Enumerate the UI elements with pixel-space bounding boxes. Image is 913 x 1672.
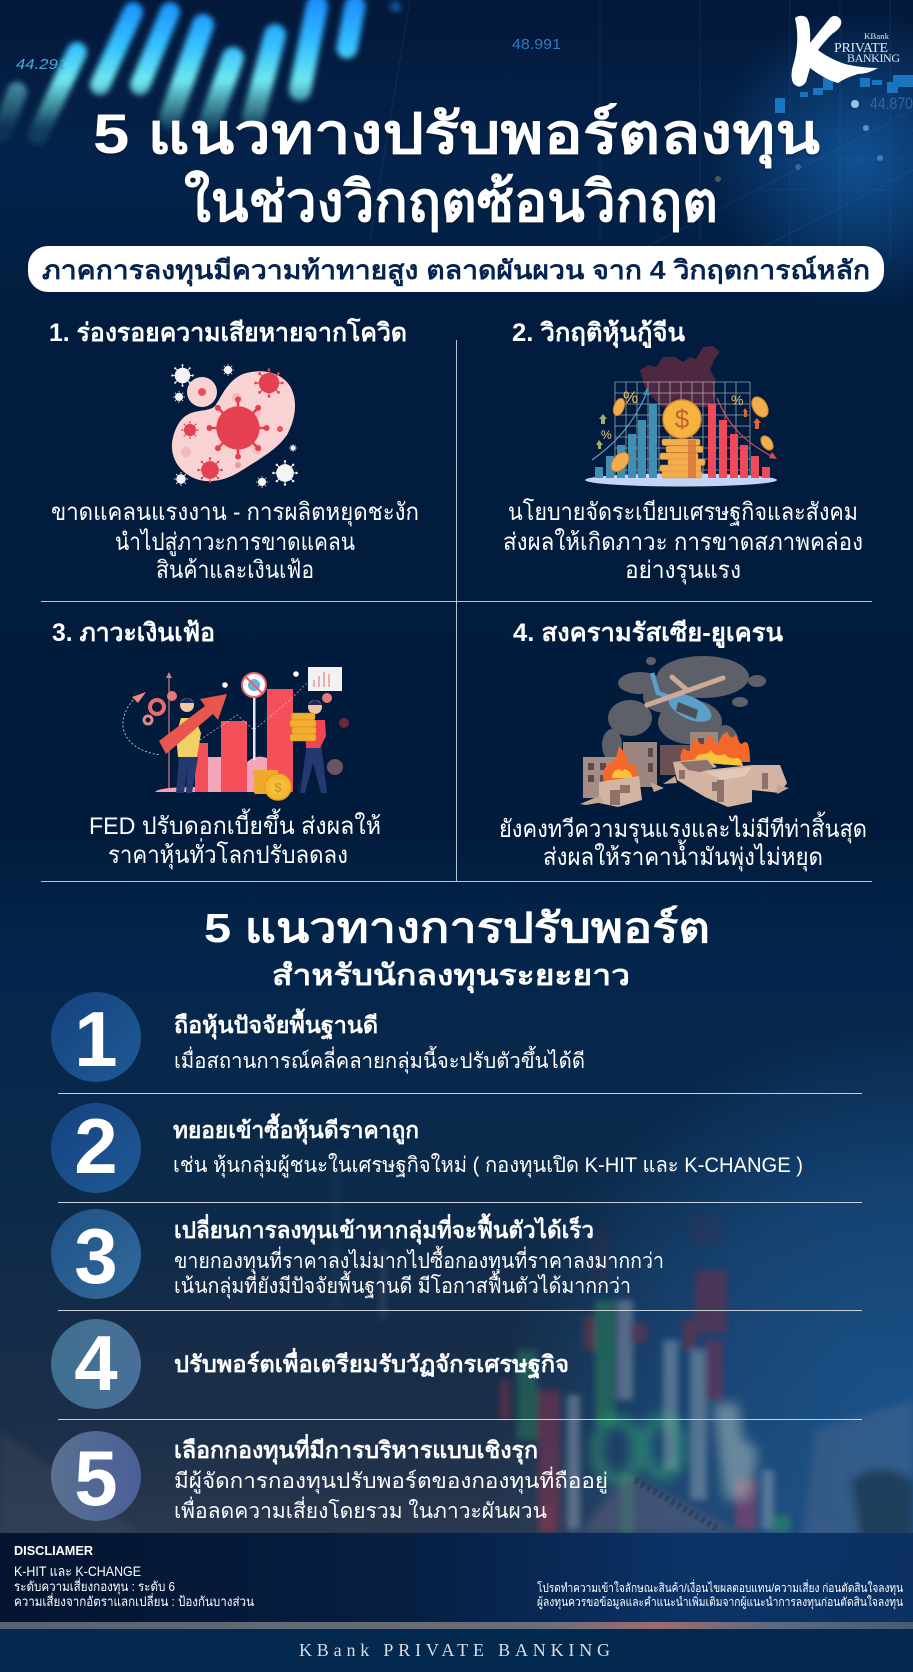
logo: KBank Private Banking: KBank (864, 31, 890, 41)
step 5 (51, 1431, 608, 1523)
section heading: 5 ways: 5 แนวทางการปรับพอร์ต (204, 905, 710, 951)
decorative strip under disclaimer (0, 1622, 913, 1629)
step 4 (51, 1319, 569, 1409)
text: china: อย่างรุนแรง (625, 557, 741, 585)
decorative top bars (2, 6, 396, 135)
icon: coins chart: % (601, 428, 612, 442)
disclaimer text left (14, 1543, 254, 1609)
market number labels (16, 36, 913, 113)
market number labels: 48.991 (512, 36, 561, 53)
step 3: เน้นกลุ่มที่ยังมีปัจจัยพื้นฐานดี มีโอกาสฟื้นตัวได้มากกว่า (174, 1271, 631, 1299)
text: covid: ขาดแคลนแรงงาน - การผลิตหยุดชะงัก (51, 499, 419, 527)
disclaimer band (0, 1533, 913, 1622)
panel: covid (49, 317, 419, 584)
icon: burning city and helicopter (580, 656, 789, 807)
subtitle pill (28, 246, 884, 292)
icon: coins chart: $ (675, 404, 690, 434)
section heading: 5 ways: สำหรับนักลงทุนระยะยาว (272, 960, 630, 993)
heading: inflation: 3. ภาวะเงินเฟ้อ (52, 619, 215, 647)
icon: coins chart: % (623, 388, 638, 407)
subtitle pill: ภาคการลงทุนมีความท้าทายสูง ตลาดผันผวน จาก 4 วิกฤตการณ์หลัก (42, 255, 870, 287)
panel: war (499, 619, 867, 872)
step number 2: 2 (74, 1102, 118, 1190)
step number 3 (51, 1209, 141, 1300)
text: war: ส่งผลให้ราคาน้ำมันพุ่งไม่หยุด (543, 839, 823, 872)
step 3: ขายกองทุนที่ราคาลงไม่มากไปซื้อกองทุนที่ราคาลงมากกว่า (174, 1246, 664, 1274)
main title: ในช่วงวิกฤตซ้อนวิกฤต (184, 169, 718, 233)
logo: KBank Private Banking: BANKING (847, 51, 900, 65)
step 1 (51, 992, 585, 1083)
main title: 5 แนวทางปรับพอร์ตลงทุน (93, 102, 820, 169)
step number 3: 3 (74, 1212, 118, 1300)
step 3: เปลี่ยนการลงทุนเข้าหากลุ่มที่จะฟื้นตัวได้เร็ว (174, 1213, 594, 1245)
icon: virus (171, 364, 298, 488)
step number 1 (51, 992, 141, 1083)
text: war (499, 811, 867, 872)
text: covid: สินค้าและเงินเฟ้อ (156, 557, 314, 584)
decorative top-right market grid (370, 0, 913, 260)
icon: people and rising bars (123, 667, 349, 800)
disclaimer text left: ระดับความเสี่ยงกองทุน : ระดับ 6 (14, 1578, 175, 1595)
step 2: เช่น หุ้นกลุ่มผู้ชนะในเศรษฐกิจใหม่ ( กองทุนเปิด K-HIT และ K-CHANGE ) (173, 1153, 803, 1178)
panel: inflation (52, 619, 381, 870)
step number 2 (51, 1102, 141, 1193)
step 1: ถือหุ้นปัจจัยพื้นฐานดี (174, 1008, 378, 1040)
step 5: เลือกกองทุนที่มีการบริหารแบบเชิงรุก (174, 1433, 538, 1465)
text: china: ส่งผลให้เกิดภาวะ การขาดสภาพคล่อง (503, 528, 863, 556)
list dividers (58, 1094, 862, 1420)
heading: war: 4. สงครามรัสเซีย-ยูเครน (513, 619, 783, 649)
heading: covid: 1. ร่องรอยความเสียหายจากโควิด (49, 317, 407, 347)
step 1: เมื่อสถานการณ์คลี่คลายกลุ่มนี้จะปรับตัวขึ้นได้ดี (174, 1046, 585, 1074)
step 3 (51, 1209, 664, 1300)
logo: KBank Private Banking: PRIVATE (834, 41, 888, 56)
text: inflation: FED ปรับดอกเบี้ยขึ้น ส่งผลให้ (89, 808, 381, 840)
icon: people and rising bars: $ (274, 780, 282, 795)
ruined houses (599, 758, 787, 807)
text: inflation (89, 808, 381, 870)
step number 4 (51, 1319, 141, 1409)
icon: coins chart: % (731, 392, 743, 408)
step number 5 (51, 1431, 141, 1522)
disclaimer text right (537, 1579, 903, 1610)
footer band: KBank PRIVATE BANKING (299, 1640, 610, 1660)
disclaimer text left: ความเสี่ยงจากอัตราแลกเปลี่ยน : ป้องกันบางส่วน (14, 1593, 254, 1609)
step 2: ทยอยเข้าซื้อหุ้นดีราคาถูก (173, 1113, 419, 1145)
panel: china debt (503, 319, 863, 585)
step 2 (51, 1102, 803, 1193)
text: covid (51, 499, 419, 584)
disclaimer text left: K-HIT และ K-CHANGE (14, 1563, 141, 1579)
text: war: ยังคงทวีความรุนแรงและไม่มีทีท่าสิ้นสุด (499, 811, 867, 844)
step 5: มีผู้จัดการกองทุนปรับพอร์ตของกองทุนที่ถืออยู่ (174, 1466, 608, 1494)
panel dividers (41, 340, 872, 882)
step number 5: 5 (74, 1434, 118, 1522)
market number labels: 44.291 (16, 56, 67, 73)
icon: coins chart (585, 346, 777, 486)
decorative bottom chart candles (2, 1216, 913, 1533)
footer band (0, 1629, 913, 1672)
disclaimer text left: DISCLIAMER (14, 1543, 94, 1558)
text: inflation: ราคาหุ้นทั่วโลกปรับลดลง (108, 838, 348, 870)
section heading: 5 ways (204, 905, 710, 993)
text: china (503, 498, 863, 585)
text: china: นโยบายจัดระเบียบเศรษฐกิจและสังคม (508, 498, 858, 526)
heading: china: 2. วิกฤติหุ้นกู้จีน (512, 319, 685, 349)
decorative banknotes (0, 1400, 913, 1540)
main title (93, 102, 820, 233)
text: covid: นำไปสู่ภาวะการขาดแคลน (115, 528, 355, 557)
logo: KBank Private Banking (792, 16, 900, 87)
step 5: เพื่อลดความเสี่ยงโดยรวม ในภาวะผันผวน (174, 1496, 547, 1523)
step number 1: 1 (74, 995, 118, 1083)
step 4: ปรับพอร์ตเพื่อเตรียมรับวัฏจักรเศรษฐกิจ (174, 1347, 569, 1379)
step number 4: 4 (74, 1319, 118, 1407)
